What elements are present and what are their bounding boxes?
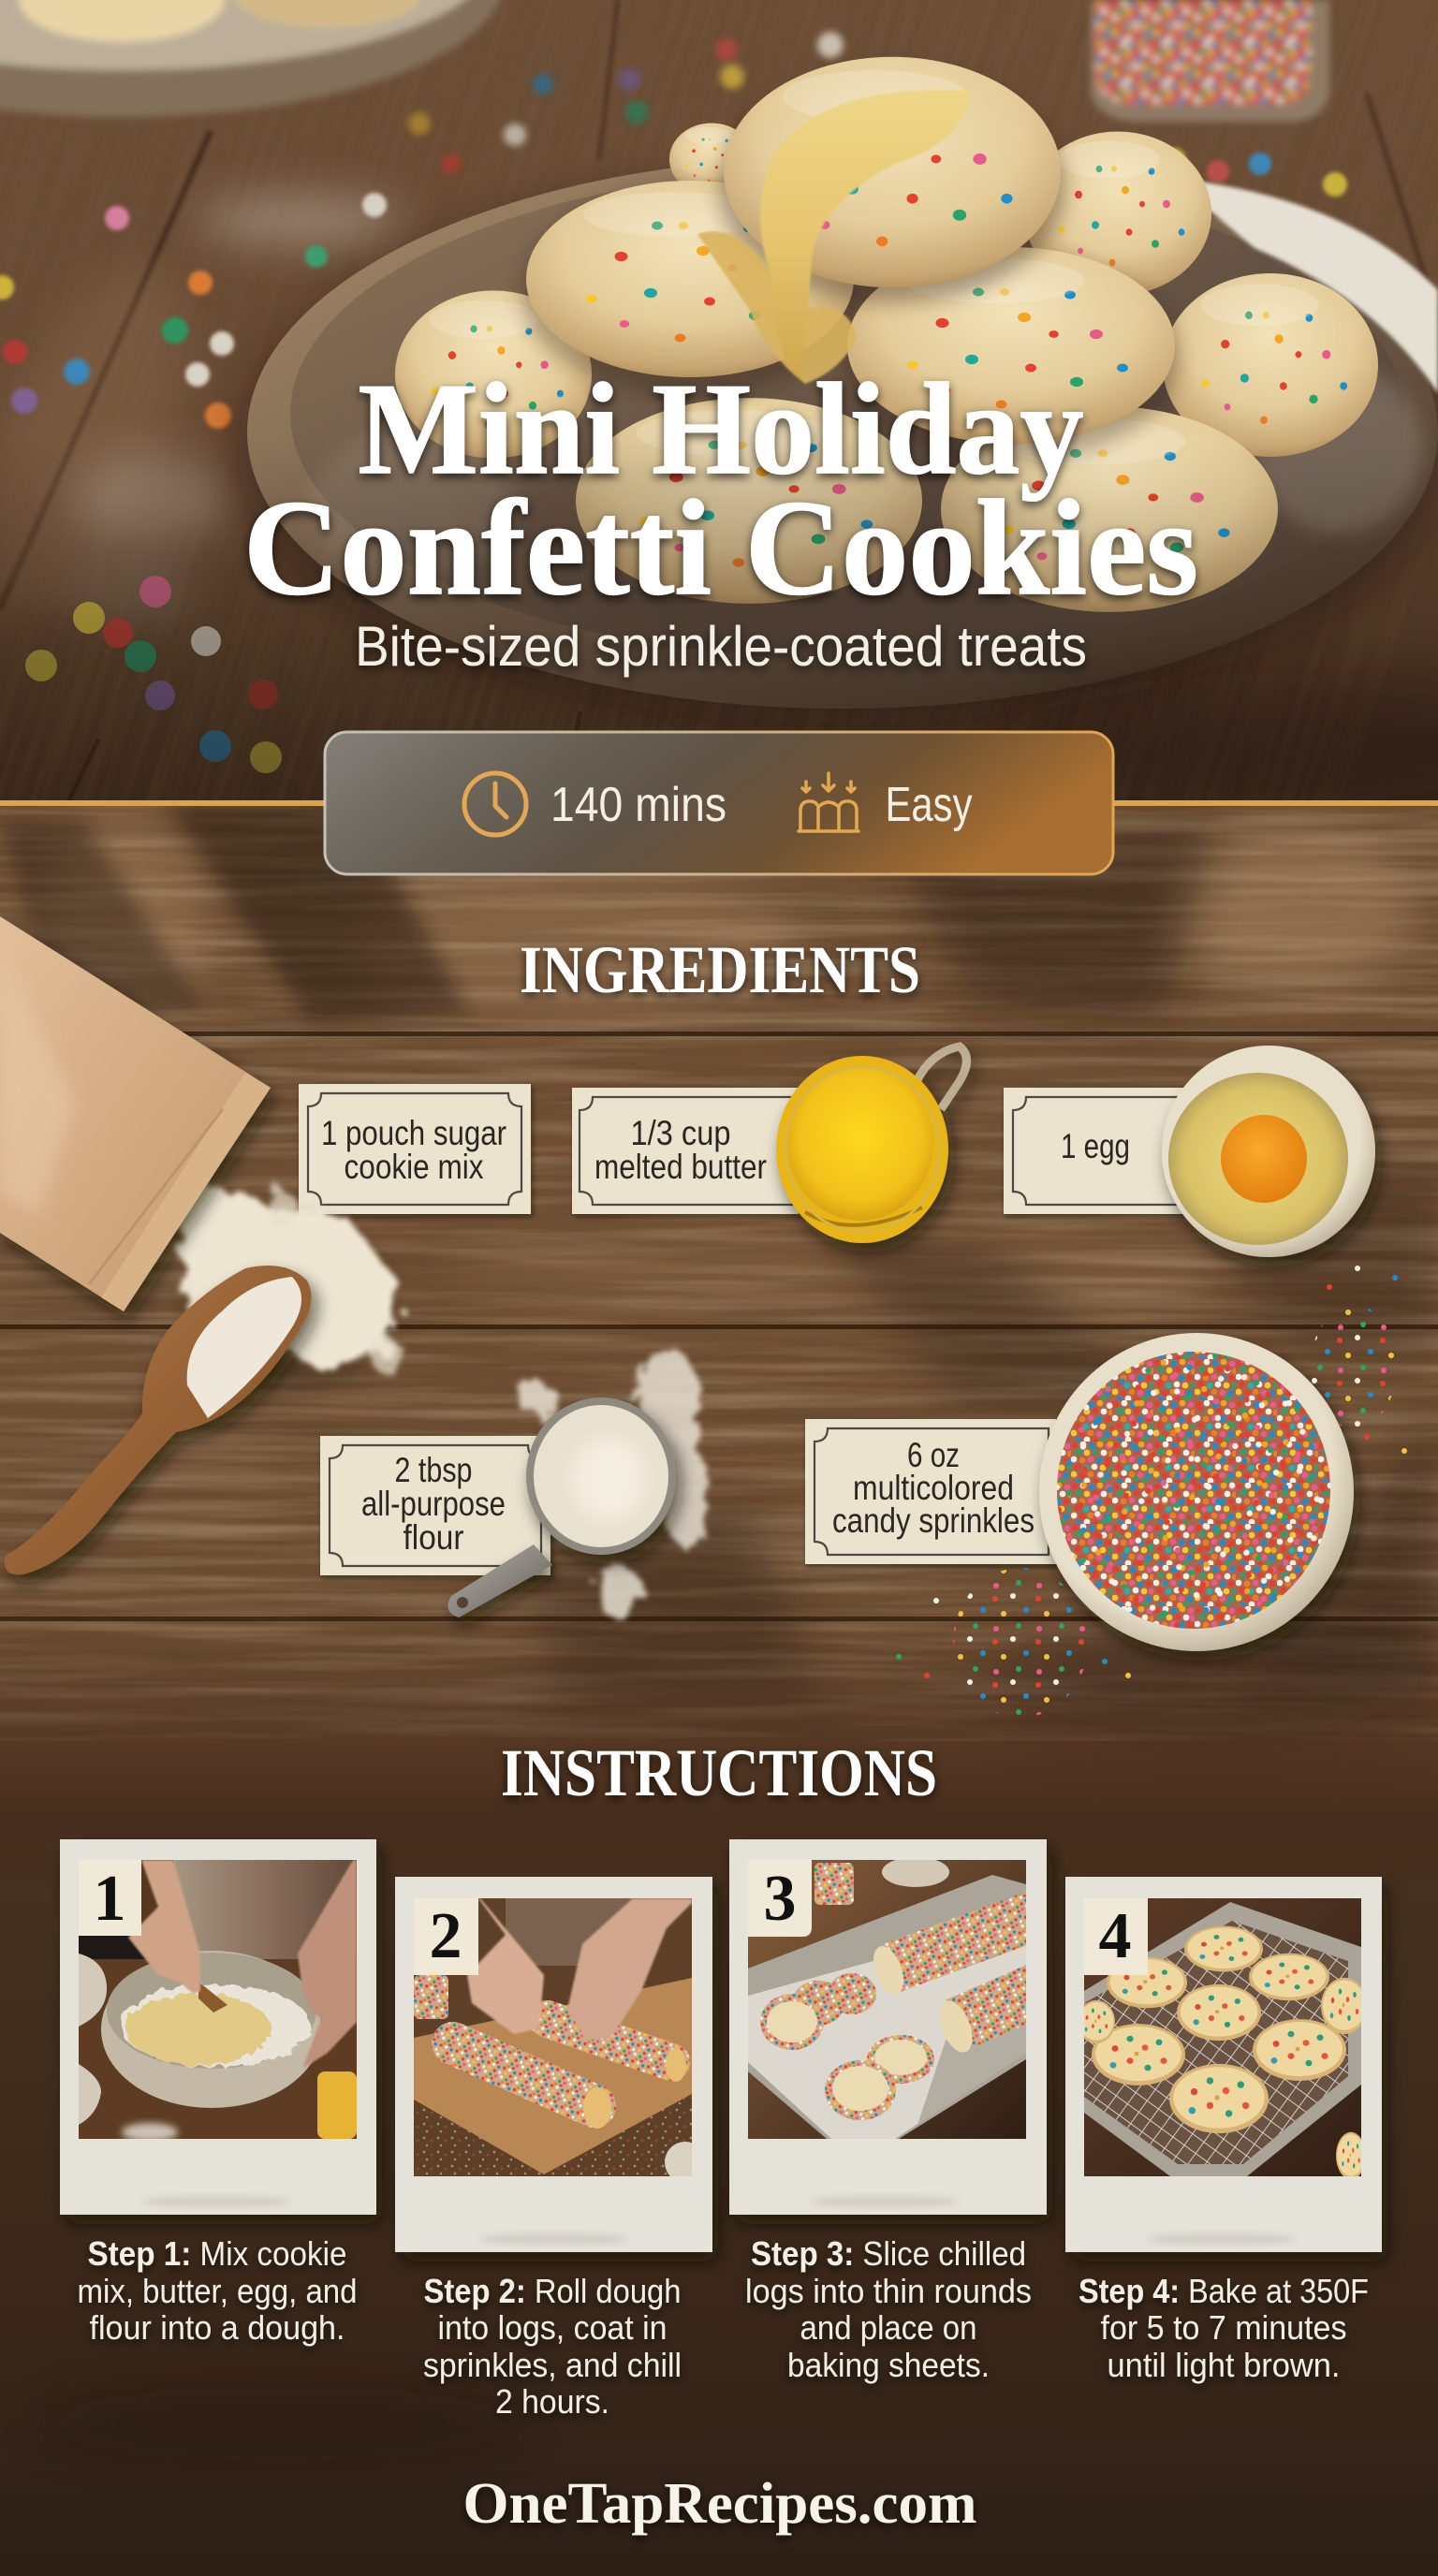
- difficulty label: Easy: [886, 778, 972, 832]
- sprinkles bowl: [1039, 1333, 1354, 1651]
- photo: sliced logs on tray: [748, 1857, 1043, 2139]
- time and difficulty pill: [325, 732, 1113, 874]
- step 1 text: Step 1: Mix cookie: [88, 2234, 346, 2273]
- step 3 text: Step 3: Slice chilled: [751, 2234, 1026, 2273]
- step card 1: [60, 1839, 376, 2215]
- step 3 text: and place on: [800, 2308, 977, 2347]
- time label: 140 mins: [550, 778, 726, 832]
- number badge 1: [79, 1860, 141, 1936]
- ingredient card: candy sprinkles: [805, 1419, 1056, 1564]
- step 2 text: sprinkles, and chill: [423, 2346, 682, 2384]
- egg in bowl: [1162, 1046, 1375, 1257]
- title: Mini Holiday: [358, 357, 1084, 502]
- step 2 text: into logs, coat in: [438, 2308, 667, 2347]
- photo: mixing dough: [79, 1860, 357, 2142]
- step 4 text: [1078, 2272, 1369, 2384]
- ingredient card: flour: [320, 1436, 550, 1575]
- number badge 3: 3: [764, 1863, 796, 1935]
- photo: baked cookies on rack: [1078, 1898, 1368, 2179]
- ingredient card: sugar cookie mix: cookie mix: [345, 1148, 484, 1186]
- cookies pile: [395, 57, 1378, 612]
- step 1 text: mix, butter, egg, and: [77, 2272, 358, 2310]
- subtitle: Bite-sized sprinkle-coated treats: [355, 615, 1087, 678]
- sprinkle jar: [1091, 0, 1329, 122]
- step 1 text: [77, 2234, 358, 2347]
- ingredient card: melted butter: [572, 1088, 818, 1214]
- step card 3: [729, 1839, 1047, 2215]
- ingredient card: egg: 1 egg: [1061, 1127, 1130, 1165]
- step card 2: [395, 1877, 712, 2252]
- number badge 4: 4: [1099, 1900, 1131, 1972]
- step 1 text: flour into a dough.: [90, 2308, 345, 2347]
- step 2 text: 2 hours.: [495, 2382, 609, 2421]
- ingredient card: flour: all-purpose: [361, 1485, 506, 1523]
- ingredient card: sugar cookie mix: [299, 1084, 531, 1214]
- step 4 text: for 5 to 7 minutes: [1101, 2308, 1346, 2347]
- ingredient card: candy sprinkles: 6 oz: [907, 1436, 960, 1474]
- lower wood background: [0, 806, 1438, 2254]
- scattered confetti: [0, 32, 1347, 773]
- title: Confetti Cookies: [243, 472, 1198, 623]
- number badge 3: [748, 1860, 812, 1937]
- flour scatter around cup: [521, 1346, 709, 1617]
- ingredient card: candy sprinkles: candy sprinkles: [832, 1501, 1034, 1540]
- ingredient card: egg: [1004, 1088, 1189, 1214]
- glass jug of melted butter: [776, 1046, 966, 1243]
- step card 4: [1065, 1877, 1382, 2252]
- step 4 text: Step 4: Bake at 350F: [1078, 2272, 1369, 2310]
- heading: instructions: INSTRUCTIONS: [501, 1735, 937, 1810]
- step 3 text: [745, 2234, 1032, 2384]
- ingredient card: melted butter: melted butter: [594, 1148, 767, 1186]
- step 4 text: until light brown.: [1107, 2346, 1341, 2384]
- title: [243, 357, 1198, 623]
- hero darkening gradient: [0, 440, 1438, 805]
- spilled cookie mix: [178, 1179, 405, 1395]
- heading: ingredients: INGREDIENTS: [520, 932, 920, 1007]
- small bowl in background: [0, 0, 506, 117]
- icon: easy difficulty: [799, 773, 858, 831]
- step 3 text: baking sheets.: [787, 2346, 990, 2384]
- ingredient card: flour: flour: [403, 1518, 464, 1557]
- flour dusting on wood: [66, 198, 403, 622]
- wooden scoop with flour: [5, 1266, 311, 1574]
- photo: rolling logs: [414, 1898, 706, 2183]
- ingredient card: flour: 2 tbsp: [395, 1451, 472, 1489]
- melted icing drip: [697, 90, 969, 384]
- number badge 1: 1: [94, 1863, 125, 1935]
- ingredient card: candy sprinkles: multicolored: [853, 1469, 1014, 1507]
- step 3 text: logs into thin rounds: [745, 2272, 1032, 2310]
- icon: clock: [464, 773, 526, 835]
- footer website: OneTapRecipes.com: [462, 2472, 977, 2536]
- plate: [239, 156, 1438, 723]
- kraft pouch: [0, 916, 271, 1311]
- number badge 4: [1084, 1898, 1148, 1975]
- ingredient card: sugar cookie mix: 1 pouch sugar: [321, 1114, 506, 1152]
- number badge 2: 2: [429, 1900, 462, 1972]
- number badge 2: [414, 1898, 478, 1975]
- measuring cup of flour: [448, 1398, 676, 1617]
- ingredient card: melted butter: 1/3 cup: [631, 1114, 730, 1152]
- step 2 text: Step 2: Roll dough: [423, 2272, 682, 2310]
- step 2 text: [423, 2272, 682, 2421]
- gold divider: [0, 800, 1438, 806]
- loose sprinkles: [896, 1266, 1407, 1718]
- hero photo: cookies on a plate: [0, 0, 1438, 800]
